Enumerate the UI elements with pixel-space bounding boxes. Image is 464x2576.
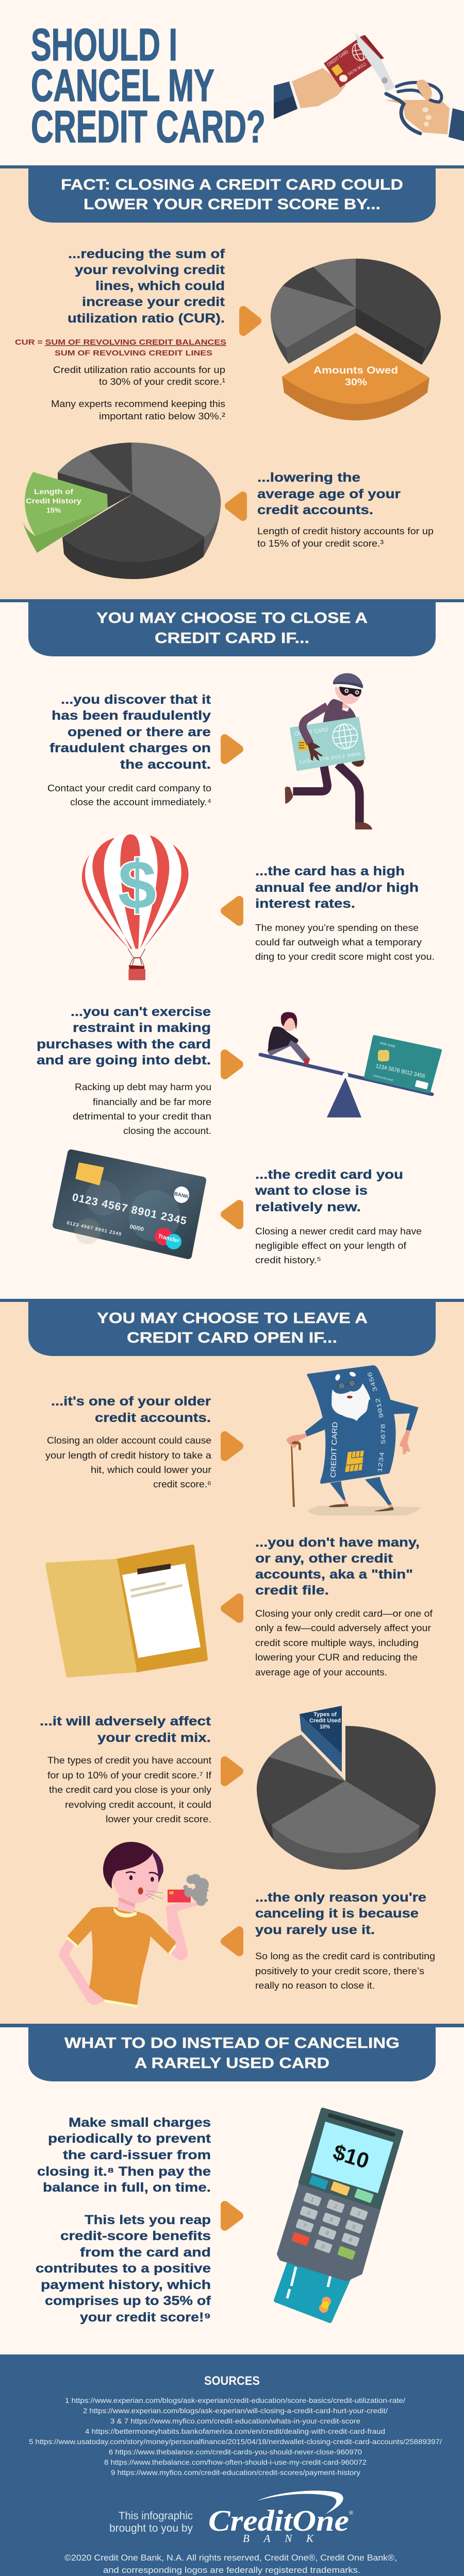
text block: source links: 5 https://www.usatoday.com/story/money/personalfinance/2015/04/18/nerdwallet-closing-credit-card-accounts/25889397/ [29,2437,442,2446]
text block: source links: 1 https://www.experian.com/blogs/ask-experian/credit-education/score-basics/credit-utilization-rate/ [65,2396,405,2404]
arrow: left [229,496,243,517]
icon: new dark credit card: BANK [173,1191,190,1200]
icon: payment terminal with card: 3 [356,2210,361,2217]
text block: thin credit file: or any, other credit [255,1551,393,1566]
text block: older accounts: credit score.⁶ [153,1479,211,1489]
text block: fraud: close the account immediately.⁴ [70,796,211,807]
text block: source links: 8 https://www.thebalance.com/how-often-should-i-use-my-credit-card-960072 [104,2458,367,2466]
text block: credit mix: your credit mix. [97,1731,211,1745]
text block: restraint: restraint in making [73,1021,211,1035]
text block: rarely used: ...the only reason you're [255,1890,426,1905]
text block: restraint: ...you can't exercise [71,1005,211,1019]
chart: pie amounts owed 30%: Amounts Owed [313,365,398,376]
text block: thin credit file: credit score multiple ways, including [255,1637,419,1648]
text block: credit mix: lower your credit score. [106,1814,211,1824]
icon: payment terminal with card: $10 [330,2140,372,2173]
text block: reducing revolving credit: lines, which could [95,279,225,293]
icon: new dark credit card [56,1153,203,1256]
text block: fraud: the account. [120,757,211,772]
icon: hands cutting a credit card with scissors: 5678 9012 [347,62,367,77]
icon: payment terminal with card: 2 [333,2203,338,2210]
text block: restraint: detrimental to your credit than [73,1111,211,1122]
icon: payment terminal with card: 5 [329,2216,334,2224]
formula: credit utilization ratio: SUM OF REVOLVING CREDIT LINES [55,349,212,358]
text block: small charges: credit-score benefits [60,2229,211,2243]
text block: credit mix: the credit card you close is your only [49,1784,212,1795]
icon: old credit card man with cane: CREDIT CARD [329,1422,339,1478]
text block: thin credit file: credit file. [255,1583,329,1598]
text block: source links: 4 https://bettermoneyhabits.bankofamerica.com/en/credit/dealing-with-credit-card-fraud [85,2427,385,2435]
heading: close tab: YOU MAY CHOOSE TO CLOSE A [96,610,368,626]
text block: reducing revolving credit: your revolving credit [75,263,225,277]
text block: utilization details: to 30% of your credit score.¹ [99,376,225,387]
text block: source links: 6 https://www.thebalance.com/credit-cards-you-should-never-close-960970 [109,2448,362,2456]
text block: source links: 2 https://www.experian.com/blogs/ask-experian/will-closing-a-credit-card-hurt-your-credit/ [83,2406,388,2415]
text block: small charges: comprises up to 35% of [45,2294,211,2308]
heading: leave open tab [28,1299,436,1356]
text block: fraud: ...you discover that it [61,692,211,707]
heading: close tab [28,599,436,656]
icon: old credit card man with cane [286,1365,420,1516]
panel: reasons to keep open [0,1299,464,2024]
text block: credit mix: The types of credit you have account [47,1755,211,1766]
text block: reducing revolving credit: increase your credit [82,295,225,309]
text block: source links: 9 https://www.myfico.com/credit-education/credit-scores/payment-history [111,2468,360,2477]
text block: small charges: from the card and [80,2245,211,2260]
icon: payment terminal with card: 4 [306,2210,311,2217]
text block: credit mix: ...it will adversely affect [40,1714,211,1728]
text block: small charges: contributes to a positive [36,2261,211,2276]
text block: restraint: purchases with the card [37,1037,211,1052]
icon: thin folder [47,1547,206,1675]
heading: fact tab: FACT: CLOSING A CREDIT CARD COULD [61,177,403,193]
icon: thief stealing card: CREDIT CARD [294,726,329,737]
text block: rarely used: really no reason to close it. [255,1980,375,1991]
icon: payment terminal with card: 8 [325,2230,330,2237]
text block: older accounts: ...it's one of your older [51,1394,211,1409]
text block: lowering average age: to 15% of your credit score.³ [257,538,384,549]
text block: older accounts: your length of credit history to take a [45,1450,212,1461]
chart: pie length of credit history 15%: Credit History [26,497,81,505]
text block: older accounts: credit accounts. [95,1411,211,1425]
text block: thin credit file: accounts, aka a "thin" [255,1567,413,1582]
heading: what to do tab: WHAT TO DO INSTEAD OF CANCELING [64,2035,400,2052]
icon: new dark credit card: 0123 4567 8901 2345 [71,1191,188,1227]
text block: small charges: Make small charges [69,2115,211,2130]
text block: copyright [64,2553,397,2575]
title [31,19,266,152]
text block: brought to you by [109,2510,193,2534]
text block: thin credit file: only a few—could adversely affect your [255,1622,431,1633]
text block: new card: Closing a newer credit card may have [255,1226,422,1236]
text block: new card: relatively new. [255,1200,361,1214]
icon: hands cutting a credit card with scissors: CREDIT CARD [326,49,350,67]
text block: high fee: could far outweigh what a temporary [255,937,422,947]
text block: lowering average age: Length of credit history accounts for up [257,526,434,536]
chart: pie types of credit used 10%: 10% [320,1724,330,1730]
icon: payment terminal with card: 6 [352,2224,357,2231]
text block: rarely used: positively to your credit score, there’s [255,1965,424,1976]
text block: copyright: ©2020 Credit One Bank, N.A. All rights reserved, Credit One®, Credit One Bank®, [64,2553,397,2563]
text block: small charges: payment history, which [41,2278,211,2292]
chart: pie types of credit used 10% [257,1706,436,1870]
panel: fact section [0,165,464,599]
text block: brought to you by: brought to you by [109,2522,193,2534]
icon: old credit card man with cane: 5678 [380,1423,387,1445]
arrow: right [225,1435,239,1457]
arrow: right [225,738,239,760]
text block: reducing revolving credit: utilization ratio (CUR). [68,311,225,326]
title: CANCEL MY [31,60,214,111]
text block: rarely used: you rarely use it. [255,1923,375,1937]
text block: small charges: balance in full, on time. [43,2180,211,2195]
text block: thin credit file: lowering your CUR and reducing the [255,1652,418,1663]
text block: older accounts: Closing an older account could cause [47,1435,211,1446]
text block: rarely used: canceling it is because [255,1906,419,1921]
text block: restraint: and are going into debt. [37,1053,211,1067]
panel: title header [0,0,464,165]
chart: pie length of credit history 15%: 15% [46,506,61,514]
text block: small charges: periodically to prevent [48,2131,211,2146]
text block: small charges: your credit score!⁹ [80,2310,211,2325]
icon: thief stealing card [285,673,372,829]
text block: thin credit file: ...you don't have many, [255,1535,420,1550]
panel: footer sources [0,2354,464,2576]
text block: lowering average age: ...lowering the [257,470,360,485]
icon: seesaw with person and heavy card: CARDHOLDER NAME [373,1074,393,1082]
text block: new card: negligible effect on your length of [255,1240,407,1251]
text block: rarely used: So long as the credit card is contributing [255,1951,435,1961]
logo: Credit One Bank: CreditOne [208,2504,349,2537]
chart: pie types of credit used 10%: Credit Used [309,1718,341,1724]
icon: payment terminal with card [276,2110,401,2321]
text block: restraint: financially and be far more [93,1096,211,1107]
text block: small charges [36,2115,211,2325]
icon: payment terminal with card: 0 [321,2243,326,2250]
icon: hot air balloon with dollar sign: $ [118,846,156,923]
formula: credit utilization ratio: CUR = SUM OF REVOLVING CREDIT BALANCES [15,338,226,347]
icon: payment terminal with card: 9 [348,2236,353,2244]
icon: new dark credit card: 0123 4567 8901 2345 [67,1220,122,1236]
text block: small charges: the card-issuer from [63,2148,211,2162]
text block: older accounts: hit, which could lower your [91,1464,211,1475]
panel: reasons to close [0,599,464,1299]
text block: fraud [47,692,211,807]
text block: source links [29,2396,442,2477]
text block: restraint: closing the account. [123,1125,211,1136]
icon: payment terminal with card: 7 [302,2223,307,2230]
chart: pie amounts owed 30%: 30% [345,377,367,388]
logo: Credit One Bank: ® [349,2510,353,2516]
text block: credit mix [40,1714,212,1824]
text block: restraint: Racking up debt may harm you [75,1081,211,1092]
icon: seesaw with person and heavy card [260,1012,440,1117]
text block: utilization details: important ratio below 30%.² [99,411,225,421]
text block: small charges: closing it.⁸ Then pay the [37,2164,211,2179]
text block: new card: want to close is [255,1183,368,1198]
title: CREDIT CARD? [31,101,266,152]
text block: fraud: opened or there are [68,725,211,739]
text block: high fee: ding to your credit score might cost you. [255,951,435,962]
text block: thin credit file: average age of your accounts. [255,1667,387,1677]
text block: new card: credit history.⁵ [255,1255,321,1265]
heading: close tab: CREDIT CARD IF... [155,630,309,647]
icon: thief stealing card: 1234 5678 9012 3456 [299,751,361,765]
text block: credit mix: for up to 10% of your credit score.⁷ If [47,1770,212,1781]
arrow: right [225,1054,239,1075]
text block: high fee: interest rates. [255,896,355,911]
text block: lowering average age: credit accounts. [257,503,373,517]
icon: seesaw with person and heavy card: BANK NAME [380,1042,395,1048]
text block: lowering average age [257,470,434,549]
logo: Credit One Bank [208,2490,353,2545]
heading: sources: SOURCES [204,2374,260,2388]
text block: high fee: The money you’re spending on these [255,922,419,933]
text block: brought to you by: This infographic [119,2510,193,2522]
chart: pie length of credit history 15% [23,443,221,579]
text block: utilization details [51,364,225,421]
text block: new card: ...the credit card you [255,1167,403,1182]
heading: what to do tab [28,2024,436,2081]
text block: new card [255,1167,422,1265]
heading: what to do tab: A RARELY USED CARD [135,2055,329,2072]
panel: what to do instead [0,2024,464,2354]
arrow: left [225,1204,239,1225]
heading: fact tab: LOWER YOUR CREDIT SCORE BY... [84,196,380,213]
chart: pie amounts owed 30% [271,259,441,420]
icon: hot air balloon with dollar sign [82,834,191,980]
arrow: left [225,900,239,922]
text block: utilization details: Credit utilization ratio accounts for up [53,364,225,375]
arrow: left [225,1930,239,1952]
icon: new dark credit card: 00/00 [129,1224,144,1233]
text block: copyright: and corresponding logos are federally registered trademarks. [103,2565,360,2575]
arrow: left [225,1598,239,1619]
heading: leave open tab: CREDIT CARD OPEN IF... [127,1330,337,1346]
formula: credit utilization ratio [15,338,226,358]
arrow: right [243,310,257,332]
title: SHOULD I [31,19,177,70]
arrow: right [225,1760,239,1782]
heading: leave open tab: YOU MAY CHOOSE TO LEAVE A [97,1310,368,1327]
icon: old credit card man with cane: 9012 [374,1397,386,1419]
text block: lowering average age: average age of your [257,487,401,501]
text block: high fee: ...the card has a high [255,864,405,878]
icon: payment terminal with card: 1 [310,2196,315,2204]
text block: older accounts [45,1394,212,1489]
text block: reducing revolving credit [68,247,225,326]
icon: old credit card man with cane: 3456 [366,1371,379,1393]
text block: source links: 3 & 7 https://www.myfico.com/credit-education/whats-in-your-credit-score [110,2417,360,2425]
text block: fraud: has been fraudulently [52,708,211,723]
text block: fraud: fraudulent charges on [49,741,211,755]
chart: pie length of credit history 15%: Length of [34,487,73,496]
arrow: right [225,2205,239,2227]
text block: high fee [255,864,435,962]
text block: fraud: Contact your credit card company to [47,783,211,793]
text block: restraint [37,1005,211,1136]
logo: Credit One Bank: BANK [243,2532,314,2545]
icon: new dark credit card: Transfer [157,1233,180,1244]
icon: old credit card man with cane: 1234 [376,1451,386,1473]
text block: reducing revolving credit: ...reducing the sum of [68,247,225,261]
text block: small charges: This lets you reap [85,2213,211,2227]
text block: thin credit file: Closing your only credit card—or one of [255,1608,433,1619]
text block: rarely used [255,1890,435,1991]
heading: fact tab [28,165,436,223]
icon: seesaw with person and heavy card: 1234 5678 9012 3456 [375,1063,426,1079]
text block: utilization details: Many experts recommend keeping this [51,398,225,409]
text block: credit mix: revolving credit account, it could [65,1799,211,1810]
text block: high fee: annual fee and/or high [255,880,419,895]
icon: hands cutting a credit card with scissors [274,32,464,141]
icon: person blowing dust off card [63,1842,209,2006]
chart: pie types of credit used 10%: Types of [313,1711,337,1718]
text block: thin credit file [255,1535,433,1677]
